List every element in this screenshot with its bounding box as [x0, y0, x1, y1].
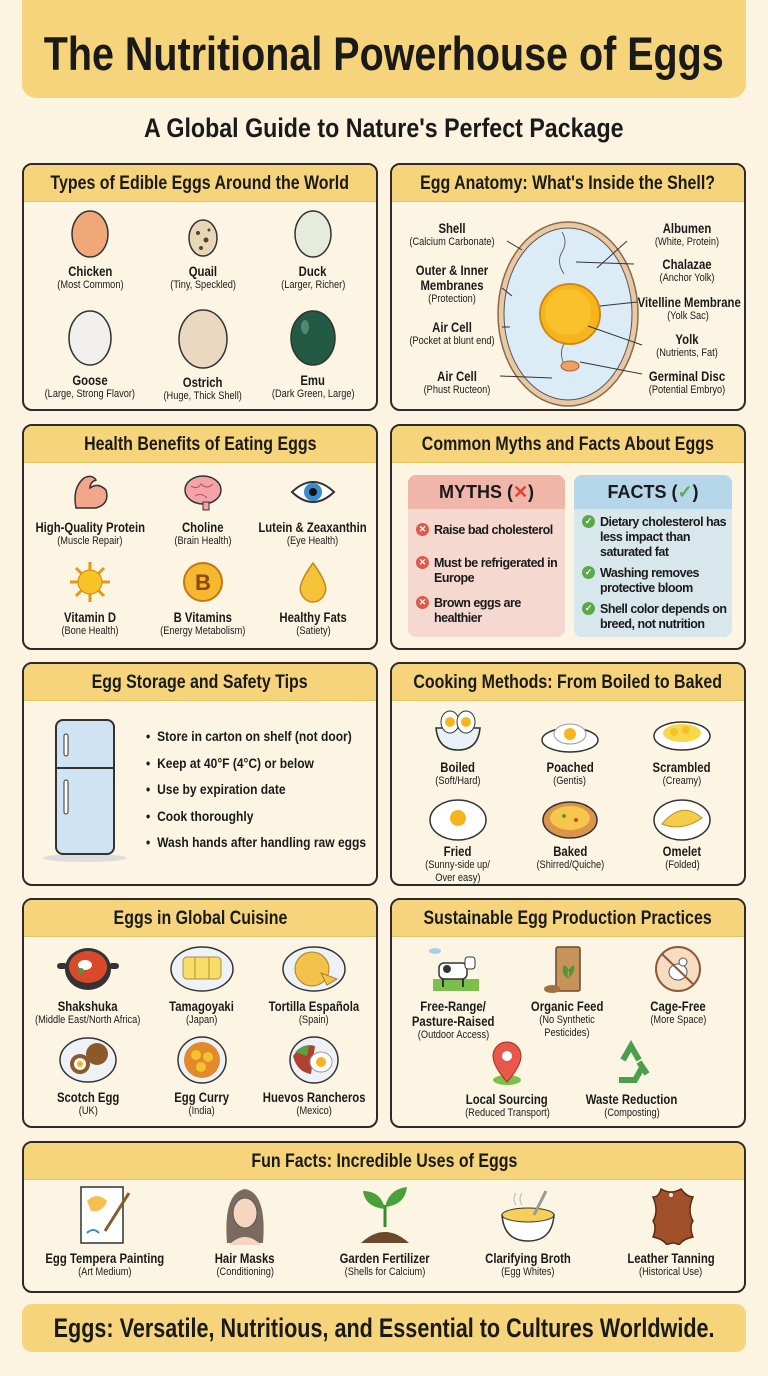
box: facts: Washing removes protective bloom — [600, 566, 699, 595]
icon: shakshuka: Shakshuka — [58, 999, 118, 1014]
panel: cooking methods: Cooking Methods: From Boiled to Baked — [414, 672, 722, 693]
icon: baked quiche: Baked — [553, 844, 587, 859]
labels: anatomy right — [655, 221, 719, 248]
icon: cage-free: (More Space) — [650, 1014, 706, 1026]
egg: chicken — [57, 210, 123, 291]
icon: cow pasture: Pasture-Raised — [412, 1014, 494, 1029]
box: myths — [408, 475, 565, 637]
labels: anatomy left: (Calcium Carbonate) — [409, 236, 495, 248]
icon: eye — [259, 481, 367, 547]
icon: recycle: (Composting) — [604, 1107, 660, 1119]
panel: storage: Egg Storage and Safety Tips — [92, 672, 308, 693]
icon: scrambled: (Creamy) — [663, 775, 701, 787]
icon: boiled: (Soft/Hard) — [435, 775, 481, 787]
panel: health benefits — [22, 424, 378, 650]
panel: myths and facts — [390, 424, 746, 650]
icon: cage-free: Cage-Free — [650, 999, 706, 1014]
icon: tortilla: (Spain) — [299, 1014, 329, 1026]
icon: shakshuka — [35, 948, 141, 1026]
icon: hair mask person: Hair Masks — [215, 1251, 275, 1266]
list: storage tips: Cook thoroughly — [157, 808, 253, 824]
footer banner — [22, 1304, 746, 1352]
title banner — [22, 0, 746, 98]
egg: duck: Duck — [299, 264, 327, 279]
icon: eye: (Eye Health) — [287, 535, 339, 547]
box: facts: FACTS (✓) — [607, 482, 699, 502]
icon: fried — [426, 799, 490, 884]
egg: emu: Emu — [301, 373, 325, 388]
box: facts: ✓ — [585, 516, 592, 526]
icon: location pin: Local Sourcing — [466, 1092, 548, 1107]
egg: goose: Goose — [72, 373, 108, 388]
icon: scotch egg — [57, 1037, 119, 1117]
icon: boiled — [435, 710, 481, 787]
icon: sprout: Garden Fertilizer — [340, 1251, 430, 1266]
icon: egg curry — [175, 1036, 229, 1117]
panel: egg anatomy: (Nutrients, Fat) — [656, 347, 718, 359]
icon: scrambled: Scrambled — [653, 760, 711, 775]
panel: egg anatomy: (Phust Ructeon) — [424, 384, 490, 396]
icon: fried: Fried — [444, 844, 472, 859]
panel: myths and facts: Common Myths and Facts About Eggs — [422, 434, 714, 455]
icon: huevos rancheros: Huevos Rancheros — [263, 1090, 365, 1105]
icon: huevos rancheros: (Mexico) — [296, 1105, 332, 1117]
icon: leather hide: Leather Tanning — [627, 1251, 715, 1266]
panel: types of eggs — [22, 163, 378, 411]
panel: egg anatomy: (Anchor Yolk) — [660, 272, 714, 284]
panel: egg anatomy: Vitelline Membrane — [638, 295, 741, 310]
footer banner: Eggs: Versatile, Nutritious, and Essential to Cultures Worldwide. — [54, 1312, 714, 1342]
icon: baked quiche: (Shirred/Quiche) — [536, 859, 604, 871]
icon: fridge — [43, 719, 127, 862]
panel: global cuisine: Eggs in Global Cuisine — [113, 908, 287, 929]
icon: feed bag: Organic Feed — [531, 999, 603, 1014]
panel: egg anatomy: Air Cell — [432, 320, 472, 335]
icon: brain: Choline — [182, 520, 224, 535]
icon: B vitamin: B Vitamins — [174, 610, 232, 625]
labels: anatomy left: Shell — [438, 221, 466, 236]
panel: cooking methods — [390, 662, 746, 886]
icon: brain — [174, 475, 231, 547]
icon: shakshuka: (Middle East/North Africa) — [35, 1014, 141, 1026]
icon: sun: Vitamin D — [64, 610, 116, 625]
panel: egg anatomy — [390, 163, 746, 411]
icon: painting: Egg Tempera Painting — [46, 1251, 164, 1266]
icon: tortilla — [268, 946, 360, 1026]
egg: duck — [281, 210, 345, 291]
list: storage tips — [146, 728, 366, 850]
panel: egg anatomy: (Yolk Sac) — [667, 310, 709, 322]
icon: hair mask person: (Conditioning) — [216, 1266, 274, 1278]
egg: emu: (Dark Green, Large) — [272, 388, 354, 400]
icon: poached: Poached — [546, 760, 594, 775]
diagram: egg cross-section — [497, 221, 642, 407]
egg: chicken: Chicken — [68, 264, 112, 279]
panel: egg anatomy: Yolk — [675, 332, 699, 347]
icon: recycle — [586, 1040, 678, 1119]
icon: feed bag: Pesticides) — [544, 1027, 590, 1039]
icon: tamagoyaki — [169, 946, 234, 1026]
icon: feed bag — [531, 946, 603, 1039]
panel: egg anatomy: Germinal Disc — [649, 369, 725, 384]
icon: omelet — [653, 799, 711, 871]
icon: recycle: Waste Reduction — [586, 1092, 678, 1107]
box: myths: Must be refrigerated in Europe — [434, 556, 557, 585]
title banner: The Nutritional Powerhouse of Eggs — [44, 26, 724, 80]
subtitle: A Global Guide to Nature's Perfect Package — [144, 112, 624, 142]
icon: scotch egg: (UK) — [78, 1105, 97, 1117]
icon: broth bowl: Clarifying Broth — [485, 1251, 571, 1266]
icon: egg curry: Egg Curry — [175, 1090, 229, 1105]
panel: fun facts: Fun Facts: Incredible Uses of Eggs — [251, 1151, 517, 1172]
icon: sprout: (Shells for Calcium) — [345, 1266, 425, 1278]
icon: painting — [46, 1186, 164, 1278]
box: myths: ✕ — [419, 524, 426, 534]
egg: chicken: (Most Common) — [57, 279, 123, 291]
panel: egg anatomy: (Potential Embryo) — [649, 384, 725, 396]
box: facts: ✓ — [585, 603, 592, 613]
list: storage tips: Keep at 40°F (4°C) or below — [157, 754, 314, 770]
icon: baked quiche — [536, 801, 604, 871]
icon: omelet: Omelet — [663, 844, 701, 859]
list: storage tips: Use by expiration date — [157, 781, 286, 797]
icon: sun: (Bone Health) — [61, 625, 119, 637]
icon: boiled: Boiled — [441, 760, 475, 775]
egg: ostrich: (Huge, Thick Shell) — [164, 390, 242, 402]
panel: sustainable production: Sustainable Egg Production Practices — [424, 908, 712, 929]
icon: B vitamin: (Energy Metabolism) — [160, 625, 246, 637]
box: myths: Brown eggs are healthier — [434, 596, 521, 625]
labels: anatomy left — [409, 221, 495, 248]
icon: tamagoyaki: (Japan) — [186, 1014, 218, 1026]
panel: egg anatomy: Chalazae — [662, 257, 712, 272]
egg: emu — [272, 310, 354, 400]
labels: anatomy right: (White, Protein) — [655, 236, 719, 248]
icon: broth bowl: (Egg Whites) — [501, 1266, 555, 1278]
box: facts — [574, 475, 732, 637]
icon: painting: (Art Medium) — [78, 1266, 132, 1278]
icon: omelet: (Folded) — [665, 859, 699, 871]
icon: poached: (Gentis) — [554, 775, 586, 787]
panel: fun facts — [22, 1141, 746, 1293]
panel: types of eggs: Types of Edible Eggs Around the World — [51, 173, 349, 194]
box: facts: Shell color depends on breed, not nutrition — [600, 602, 727, 631]
panel: global cuisine — [22, 898, 378, 1128]
panel: egg anatomy: (Protection) — [428, 293, 476, 305]
panel: storage — [22, 662, 378, 886]
icon: scotch egg: Scotch Egg — [57, 1090, 119, 1105]
icon: huevos rancheros — [263, 1036, 366, 1117]
egg: ostrich — [164, 309, 242, 402]
icon: scrambled — [652, 721, 711, 787]
icon: location pin — [465, 1042, 550, 1119]
egg: goose: (Large, Strong Flavor) — [45, 388, 135, 400]
egg: goose — [45, 310, 135, 400]
icon: brain: (Brain Health) — [174, 535, 231, 547]
icon: oil drop: Healthy Fats — [279, 610, 347, 625]
icon: muscle: (Muscle Repair) — [57, 535, 123, 547]
icon: cage-free — [650, 946, 706, 1026]
panel: egg anatomy: Membranes — [420, 278, 484, 293]
list: storage tips: Store in carton on shelf (not door) — [157, 728, 352, 744]
icon: cow pasture: (Outdoor Access) — [417, 1029, 489, 1041]
icon: tortilla: Tortilla Española — [269, 999, 359, 1014]
panel: sustainable production — [390, 898, 746, 1128]
icon: B vitamin — [160, 562, 246, 637]
icon: eye: Lutein & Zeaxanthin — [259, 520, 367, 535]
icon: hair mask person — [215, 1189, 275, 1278]
egg: quail: (Tiny, Speckled) — [170, 279, 236, 291]
panel: egg anatomy: Outer & Inner — [416, 263, 488, 278]
box: myths: ✕ — [419, 557, 426, 567]
labels: anatomy right: Albumen — [663, 221, 711, 236]
icon: cow pasture: Free-Range/ — [420, 999, 486, 1014]
icon: location pin: (Reduced Transport) — [465, 1107, 549, 1119]
icon: poached — [541, 724, 599, 787]
list: storage tips: Wash hands after handling raw eggs — [157, 834, 366, 850]
box: myths: ✕ — [419, 597, 426, 607]
panel: egg anatomy: Air Cell — [437, 369, 477, 384]
icon: leather hide — [627, 1188, 715, 1278]
icon: egg curry: (India) — [189, 1105, 215, 1117]
egg: quail — [170, 219, 236, 291]
icon: tamagoyaki: Tamagoyaki — [170, 999, 234, 1014]
icon: fried: Over easy) — [435, 872, 481, 884]
box: facts: ✓ — [585, 567, 592, 577]
icon: cow pasture — [412, 948, 494, 1041]
panel: egg anatomy: (Pocket at blunt end) — [409, 335, 495, 347]
icon: oil drop: (Satiety) — [296, 625, 330, 637]
icon: sun — [61, 562, 119, 637]
panel: health benefits: Health Benefits of Eating Eggs — [84, 434, 316, 455]
icon: sprout — [340, 1187, 430, 1278]
panel: egg anatomy: Egg Anatomy: What's Inside the Shell? — [421, 173, 715, 194]
icon: muscle: High-Quality Protein — [35, 520, 145, 535]
icon: feed bag: (No Synthetic — [539, 1014, 595, 1026]
egg: quail: Quail — [189, 264, 217, 279]
box: facts: Dietary cholesterol has less impact than saturated fat — [600, 515, 726, 559]
icon: leather hide: (Historical Use) — [639, 1266, 703, 1278]
egg: ostrich: Ostrich — [183, 375, 223, 390]
egg: duck: (Larger, Richer) — [281, 279, 345, 291]
box: myths: MYTHS (✕) — [439, 482, 534, 502]
icon: fried: (Sunny-side up/ — [426, 859, 490, 871]
icon: muscle — [35, 476, 145, 547]
box: myths: Raise bad cholesterol — [434, 523, 553, 537]
icon: oil drop — [279, 562, 347, 637]
icon: broth bowl — [485, 1190, 571, 1278]
icon: B vitamin: B — [195, 570, 211, 595]
